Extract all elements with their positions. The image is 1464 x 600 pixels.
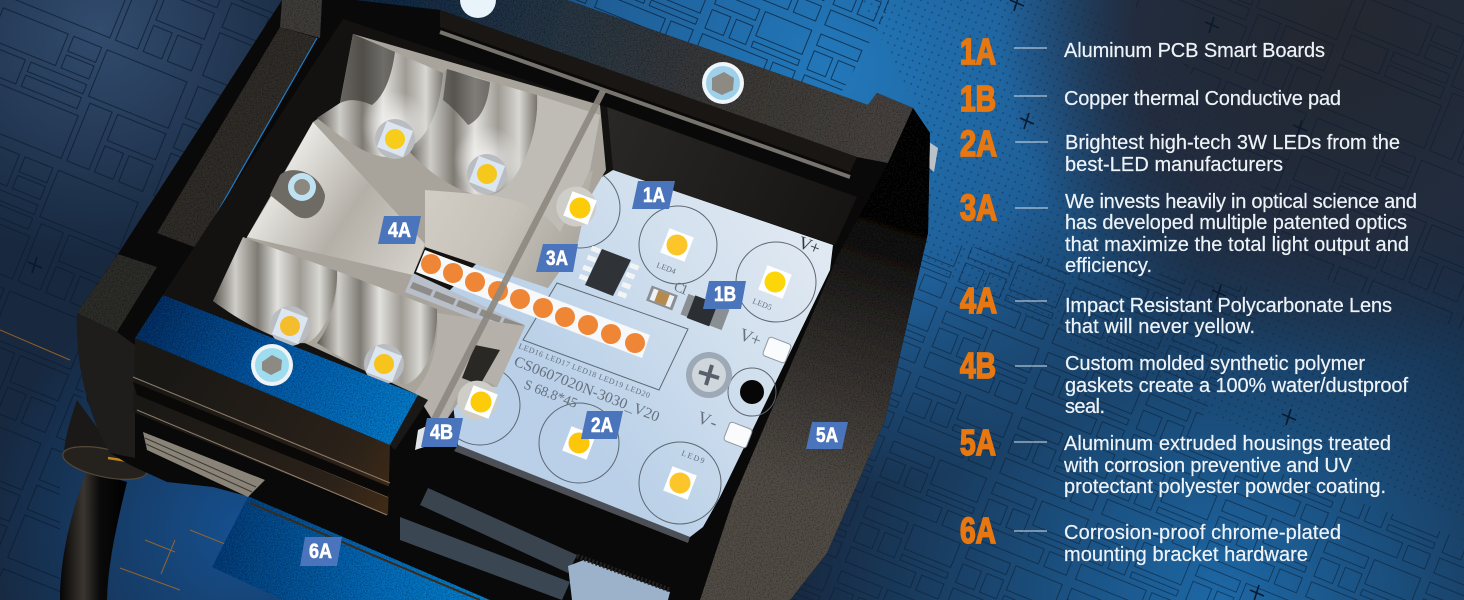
capacitor C1: [646, 286, 678, 310]
legend row 6A: Corrosion-proof chrome-plated: [1064, 522, 1341, 544]
silk outlines: [440, 168, 816, 524]
callout tag: 1A: [632, 181, 675, 209]
board markings: C1: [672, 280, 690, 299]
blue rail over optics with screw: [135, 295, 428, 450]
legend row 4B: 4B: [960, 345, 996, 386]
legend row 5A: 5A: [960, 422, 996, 463]
legend row 3A: has developed multiple patented optics: [1065, 212, 1407, 234]
legend row 5A: [960, 422, 1391, 498]
power pads: [723, 336, 792, 449]
chrome reflector optics: [213, 34, 606, 432]
orange LED row: [416, 250, 650, 358]
board markings: LED4: [655, 260, 677, 276]
left textured strip: [77, 0, 322, 458]
callout tag: 5A: [806, 422, 848, 449]
board markings: [512, 232, 823, 465]
callout tag: 3A: [536, 244, 578, 272]
callout tag: 5A: 5A: [816, 424, 838, 447]
LED circuit board: [416, 168, 833, 543]
gasket corner: [415, 420, 440, 450]
legend row 2A: 2A: [960, 123, 997, 164]
legend row 6A: 6A: [960, 510, 996, 551]
screw right: [702, 62, 744, 104]
LEDs with chrome rings near the lens wall: [451, 181, 602, 426]
legend row 4A: [960, 280, 1392, 338]
lower grey strips: [400, 488, 670, 600]
legend row 1B: [960, 78, 1341, 119]
callout tag: 1A: 1A: [643, 184, 665, 207]
lower cups: [213, 237, 525, 432]
board markings: CS0607020N-3030_V20: [512, 354, 662, 426]
top rail with screw: [355, 0, 913, 177]
legend row 4A: that will never yellow.: [1065, 316, 1255, 338]
legend row 2A: Brightest high-tech 3W LEDs from the: [1065, 132, 1400, 154]
upper cups: [317, 34, 600, 232]
callout tag: 2A: 2A: [591, 414, 613, 437]
legend row 5A: protectant polyester powder coating.: [1064, 476, 1386, 498]
board LEDs: [562, 228, 792, 500]
diode: [680, 293, 730, 331]
side clip on housing: [926, 140, 938, 172]
callout tag: 1B: [703, 281, 746, 309]
window interior: [163, 19, 613, 445]
legend row 3A: We invests heavily in optical science and: [1065, 191, 1417, 213]
legend row 3A: 3A: [960, 187, 997, 228]
board markings: V-: [695, 407, 720, 433]
cup LEDs: [264, 113, 513, 390]
mounting post and cable: [60, 400, 150, 600]
callout tag: 4A: [378, 216, 421, 244]
callout tag: 4A: 4A: [388, 219, 411, 242]
board markings: LED9: [680, 448, 706, 465]
legend row 1A: Aluminum PCB Smart Boards: [1064, 40, 1325, 62]
callout tag: 3A: 3A: [546, 247, 568, 270]
inner back wall: [607, 107, 857, 245]
callout tag: 6A: 6A: [309, 540, 332, 563]
legend row 3A: [960, 187, 1417, 277]
mounting bracket: blue textured plate: [212, 493, 490, 600]
callout tag: 4B: [421, 418, 463, 447]
glass lens cross-section: [419, 90, 606, 445]
legend row 4B: [960, 345, 1408, 418]
legend row 5A: with corrosion preventive and UV: [1063, 455, 1353, 477]
legend row 4A: 4A: [960, 280, 997, 321]
screw top: [460, 0, 496, 18]
extruded side rail: [133, 338, 390, 515]
lower chrome lip: [405, 273, 525, 334]
legend row 1A: [960, 31, 1325, 72]
legend row 3A: that maximize the total light output and: [1065, 234, 1409, 256]
legend row 1B: 1B: [960, 78, 996, 119]
callout tag: 6A: [300, 537, 342, 566]
hex screw in reflector: [270, 170, 325, 218]
mounting screw and hole: [686, 352, 764, 404]
chip: [579, 246, 639, 299]
legend row 1A: 1A: [960, 31, 996, 72]
callout tag: 2A: [581, 411, 623, 439]
screw lower left: [251, 344, 293, 386]
callout tag: 1B: 1B: [714, 283, 736, 306]
legend row 4A: Impact Resistant Polycarbonate Lens: [1065, 295, 1392, 317]
legend row 6A: [960, 510, 1341, 566]
middle reflector plate: [425, 170, 593, 288]
legend row 3A: efficiency.: [1065, 255, 1152, 277]
board markings: S 68.8*45: [522, 378, 579, 412]
callout tag: 4B: 4B: [430, 421, 453, 444]
side face of the housing: [700, 108, 930, 600]
legend row 5A: Aluminum extruded housings treated: [1064, 433, 1391, 455]
legend row 2A: [960, 123, 1400, 176]
light housing body: [77, 0, 930, 600]
legend row 4B: gaskets create a 100% water/dustproof: [1065, 375, 1408, 397]
legend row 6A: mounting bracket hardware: [1064, 544, 1308, 566]
chrome base fill: [213, 34, 606, 430]
legend row 4B: seal.: [1065, 396, 1105, 418]
board markings: V+: [796, 232, 823, 259]
legend row 2A: best-LED manufacturers: [1065, 154, 1283, 176]
board markings: LED5: [751, 296, 773, 312]
legend row 4B: Custom molded synthetic polymer: [1065, 353, 1365, 375]
legend row 1B: Copper thermal Conductive pad: [1064, 88, 1341, 110]
board markings: V+: [737, 324, 764, 351]
board markings: LED16 LED17 LED18 LED19 LED20: [517, 341, 651, 400]
